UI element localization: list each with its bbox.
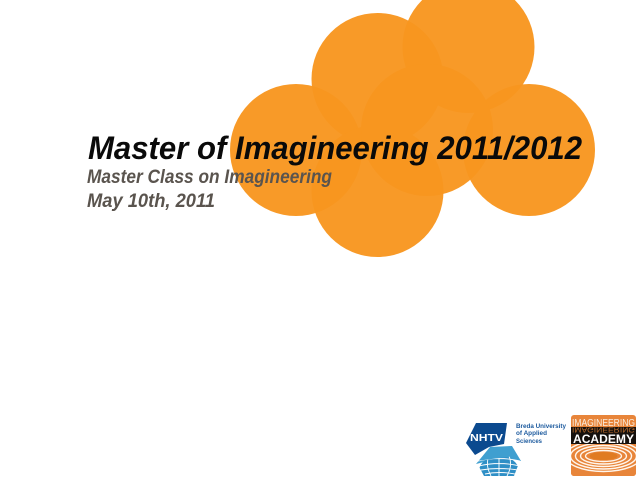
title: Master of Imagineering 2011/2012 [88, 130, 582, 166]
Breda University text: of Applied [516, 430, 547, 437]
globe icon [478, 456, 520, 476]
date: May 10th, 2011 [87, 191, 215, 212]
ripple centre [590, 452, 618, 460]
logo: Imagineering Academy [571, 415, 636, 476]
Breda University text [516, 423, 566, 445]
NHTV lettering: NHTV [470, 433, 503, 444]
orange badge [571, 415, 636, 476]
Breda University text: Breda University [516, 423, 566, 430]
light blue panel [476, 446, 521, 464]
black band [571, 427, 636, 444]
Breda University text: Sciences [516, 438, 542, 445]
logo: NHTV [466, 423, 566, 480]
overlapping orange circles [230, 0, 595, 257]
NHTV blue flag [466, 423, 507, 455]
ripple rings [571, 444, 636, 476]
ACADEMY lettering: ACADEMY [573, 434, 634, 446]
subtitle: Master Class on Imagineering [87, 167, 332, 188]
